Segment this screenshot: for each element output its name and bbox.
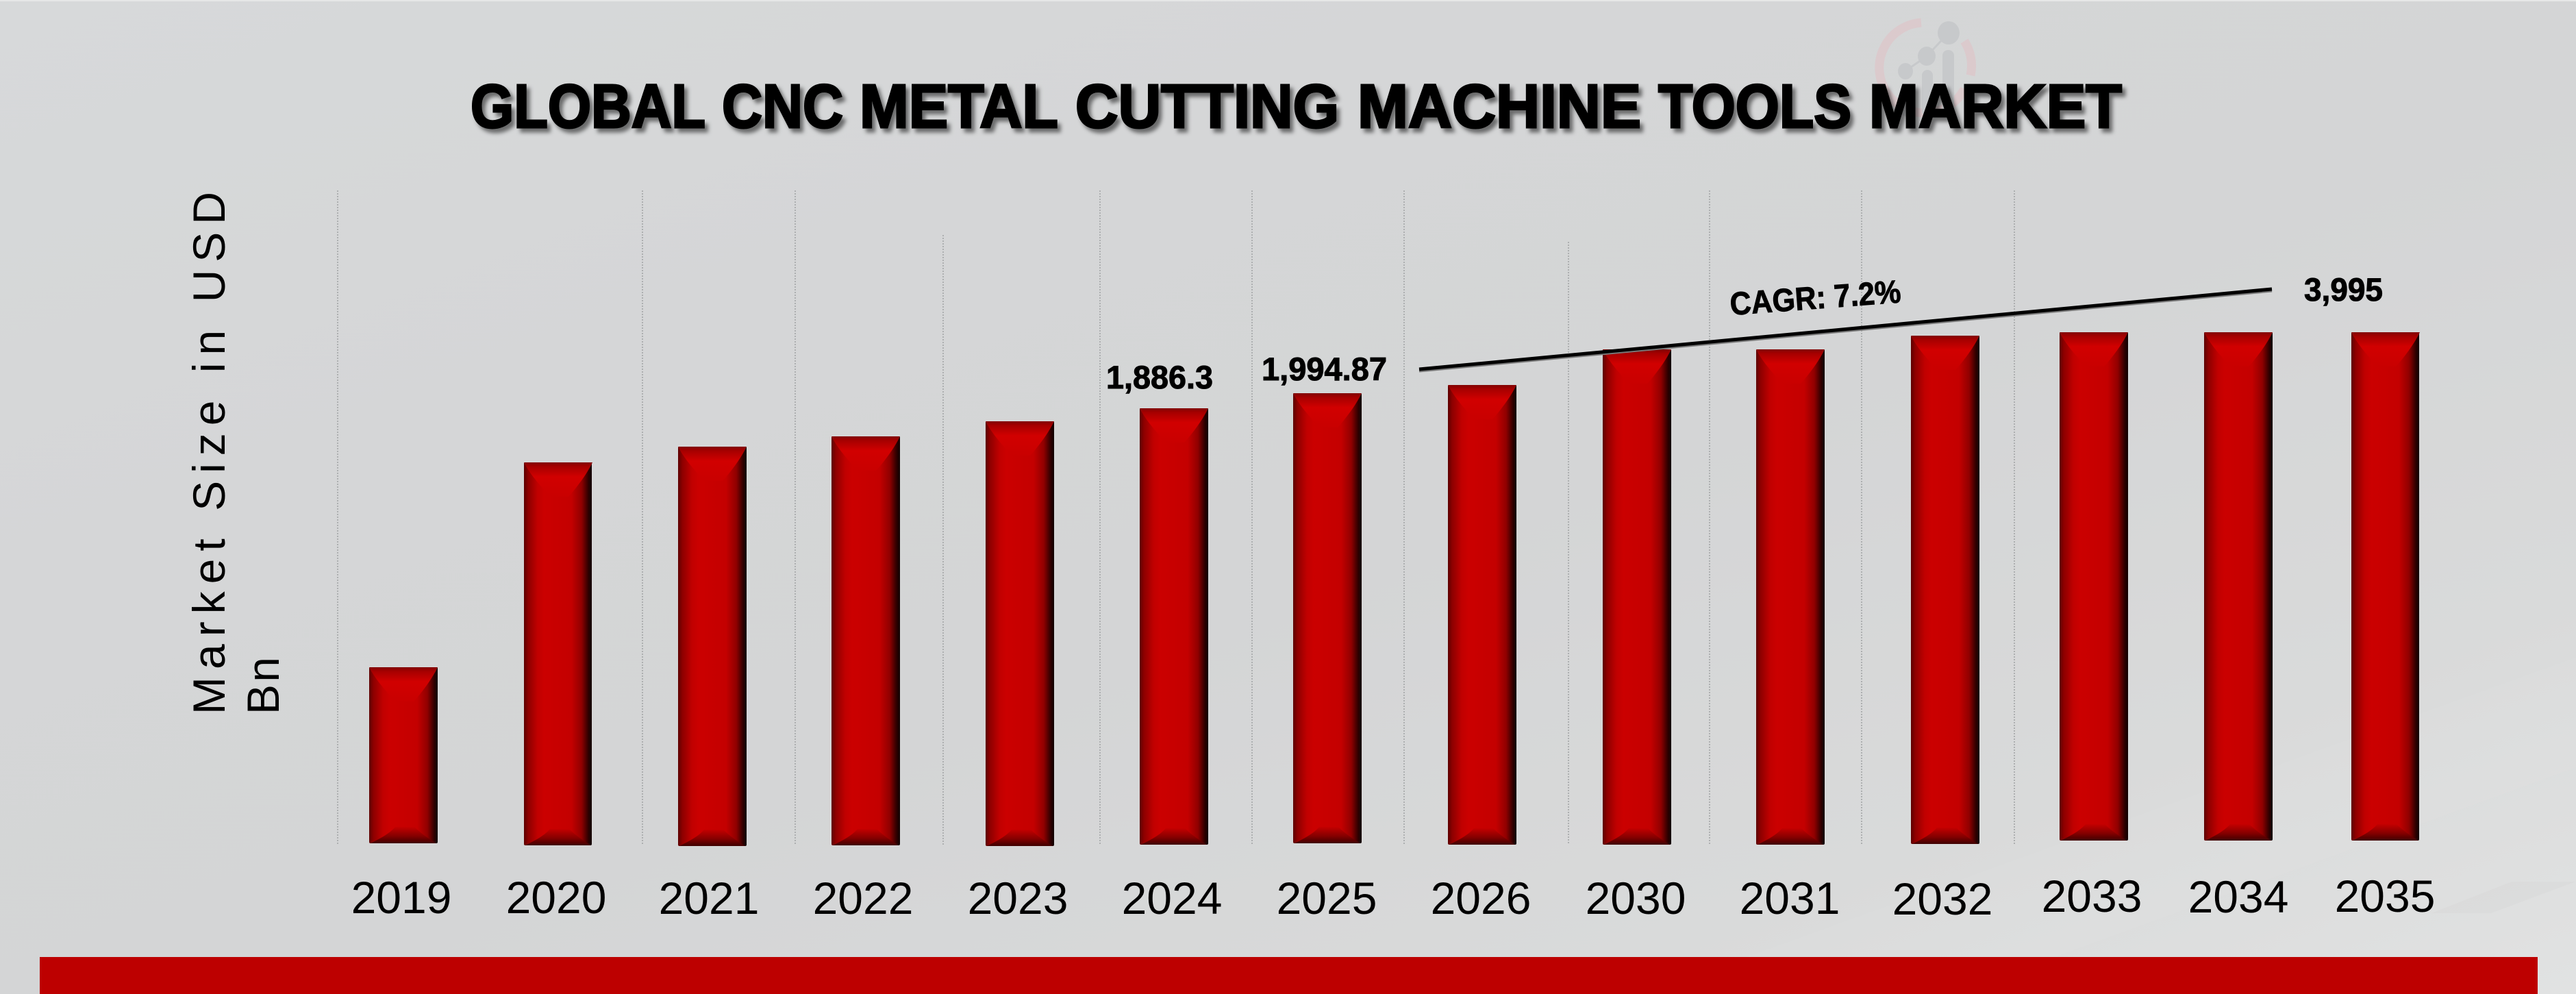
bar: 2032 <box>1911 336 1979 844</box>
value label: 2035: 3,995 <box>2304 271 2383 308</box>
bar chart <box>369 332 2420 846</box>
title: CNC <box>722 73 843 141</box>
x-axis year labels: 2026 <box>1431 873 1531 923</box>
x-axis year labels: 2025 <box>1277 873 1377 923</box>
x-axis year labels: 2019 <box>351 872 451 923</box>
x-axis year labels <box>351 871 2435 924</box>
x-axis year labels: 2024 <box>1122 873 1222 923</box>
value label: 2024: 1,886.3 <box>1106 359 1213 395</box>
CAGR trend line <box>1419 289 2272 371</box>
bar: 2023 <box>986 421 1054 846</box>
x-axis year labels: 2030 <box>1586 873 1686 923</box>
x-axis year labels: 2032 <box>1892 873 1992 924</box>
bar: 2035 <box>2351 332 2420 841</box>
bar: 2021 <box>678 447 747 846</box>
footer band <box>40 957 2538 994</box>
bar: 2026 <box>1448 385 1516 845</box>
y-axis label <box>184 192 288 715</box>
bar: 2031 <box>1756 349 1825 845</box>
y-axis label: Bn <box>238 657 288 715</box>
x-axis year labels: 2033 <box>2042 871 2142 921</box>
x-axis year labels: 2021 <box>659 873 759 923</box>
title: MARKET <box>1869 73 2122 141</box>
value label: 2025: 1,994.87 <box>1262 351 1387 387</box>
bar: 2019 <box>369 667 438 843</box>
bar: 2030 <box>1603 349 1671 845</box>
bar: 2024 <box>1140 408 1208 845</box>
x-axis year labels: 2034 <box>2188 871 2288 922</box>
x-axis year labels: 2031 <box>1740 873 1840 923</box>
bar: 2020 <box>524 462 592 845</box>
x-axis year labels: 2035 <box>2335 871 2435 921</box>
title: CUTTING <box>1075 73 1339 141</box>
y-axis label: Market Size in USD <box>184 192 234 715</box>
x-axis year labels: 2020 <box>506 872 606 923</box>
title: GLOBAL <box>471 73 705 141</box>
bar: 2034 <box>2204 332 2273 841</box>
title: TOOLS <box>1658 73 1851 141</box>
CAGR label: CAGR: 7.2% <box>1729 273 1902 322</box>
bar: 2025 <box>1293 393 1362 843</box>
icon: watermark logo <box>1879 21 1972 116</box>
x-axis year labels: 2022 <box>813 873 913 923</box>
title: MACHINE <box>1358 73 1641 141</box>
bar: 2022 <box>831 436 900 845</box>
title: METAL <box>860 73 1058 141</box>
x-axis year labels: 2023 <box>968 873 1068 923</box>
bar: 2033 <box>2060 332 2128 841</box>
title <box>471 73 2122 141</box>
